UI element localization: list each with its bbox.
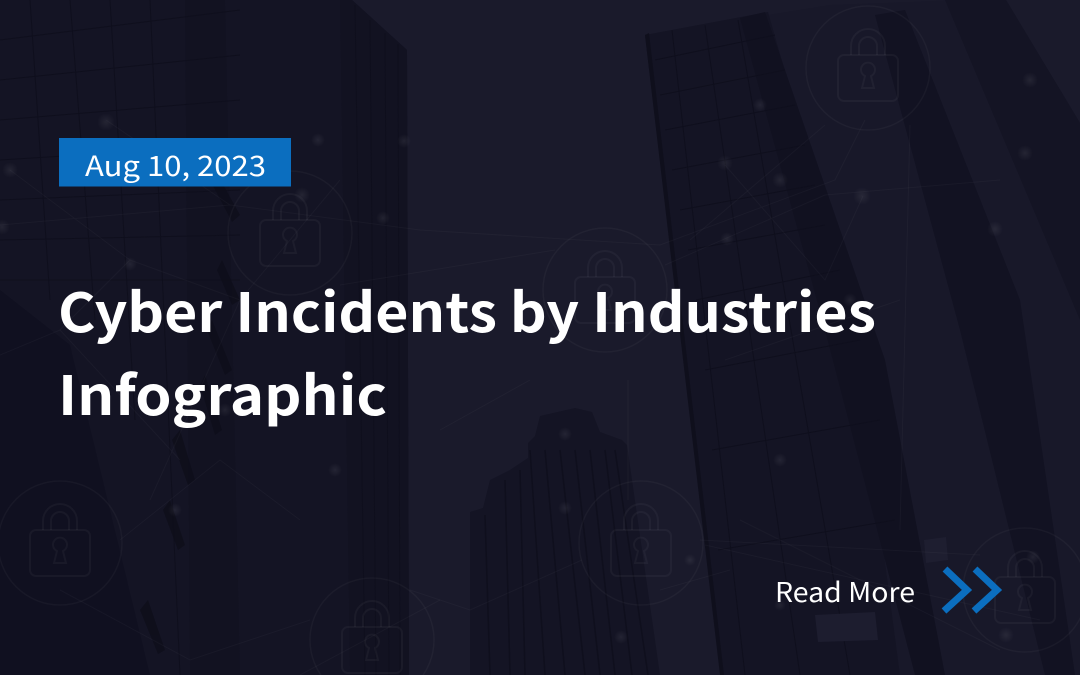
icon: padlock upper left — [228, 171, 352, 295]
read more link: Read More — [775, 571, 915, 610]
date badge — [59, 138, 291, 186]
network lines — [0, 120, 1040, 675]
icon: padlock bottom right — [963, 528, 1080, 652]
title: Infographic — [58, 352, 387, 431]
icon: double chevron arrow — [944, 569, 997, 611]
icon: padlock bottom left-centre — [310, 578, 434, 675]
title — [58, 269, 876, 431]
icon: padlock top right — [806, 6, 930, 130]
skyscraper: right tower — [645, 0, 1080, 675]
skyscraper: centre tower with dome — [470, 408, 660, 675]
icon: padlock centre — [543, 228, 667, 352]
title: Cyber Incidents by Industries — [58, 269, 876, 348]
date badge: Aug 10, 2023 — [85, 145, 266, 185]
icon: padlock lower left — [0, 481, 122, 605]
skyscraper: left tower — [0, 0, 409, 675]
icon: padlock bottom centre — [579, 481, 703, 605]
